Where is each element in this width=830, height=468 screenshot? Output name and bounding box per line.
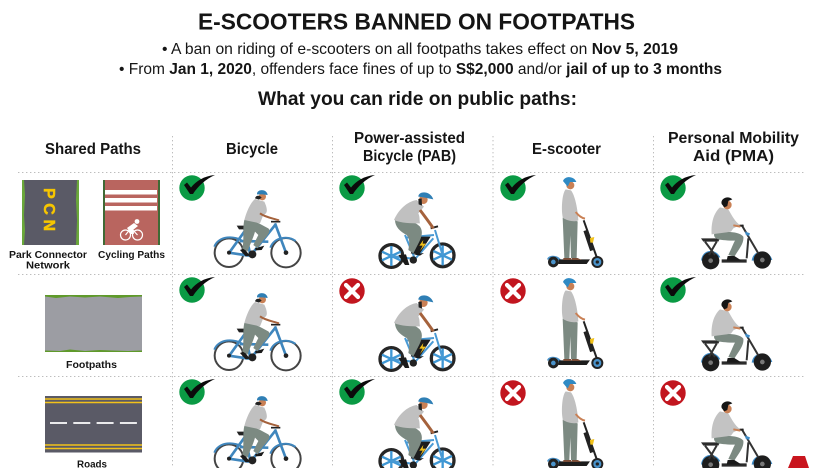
illustration: personal mobility aid (701, 401, 772, 468)
PAB allowed on shared paths (339, 175, 375, 201)
column header: personal mobility aid: Personal Mobility (668, 130, 799, 147)
PAB banned on footpaths (339, 278, 365, 304)
row 2: footpaths (179, 277, 772, 371)
illustration: e-scooter (547, 278, 603, 369)
illustration: bicycle (214, 396, 301, 468)
bullet: ban takes effect: • A ban on riding of e-scooters on all footpaths takes effect on Nov 5, 2019 (162, 41, 678, 58)
path image: cycling paths (103, 180, 160, 245)
label: park connector network (9, 250, 87, 272)
column header: personal mobility aid: Aid (PMA) (693, 148, 774, 165)
path image: park connector network (22, 180, 79, 245)
illustration: personal mobility aid (701, 299, 772, 371)
illustration: bicycle (214, 190, 301, 267)
label: park connector network: Network (26, 260, 70, 272)
e-scooter allowed on shared paths (500, 175, 536, 201)
e-scooter banned on footpaths (500, 278, 526, 304)
illustration: bicycle (214, 293, 301, 370)
row 1: allowed on shared paths (179, 175, 772, 269)
PMA banned on roads (660, 380, 686, 406)
table grid lines (18, 136, 804, 468)
illustration: power-assisted bicycle (380, 192, 454, 267)
illustration: personal mobility aid (701, 197, 772, 269)
label: cycling paths: Cycling Paths (98, 250, 165, 261)
column header: personal mobility aid (668, 130, 799, 165)
illustration: power-assisted bicycle (380, 397, 454, 468)
path image: footpaths (45, 295, 142, 352)
logo: red triangle mark (788, 456, 809, 468)
bicycle allowed on shared paths (179, 175, 215, 201)
subheading: What you can ride on public paths: (258, 88, 577, 110)
column header: power-assisted bicycle: Bicycle (PAB) (363, 148, 456, 165)
e-scooter banned on roads (500, 380, 526, 406)
column header: e-scooter: E-scooter (532, 141, 601, 158)
illustration: e-scooter (547, 177, 603, 268)
label: footpaths: Footpaths (66, 359, 117, 371)
title: E-SCOOTERS BANNED ON FOOTPATHS (198, 8, 635, 34)
bicycle allowed on footpaths (179, 277, 215, 303)
label: park connector network: Park Connector (9, 250, 87, 261)
row 3: roads (179, 379, 772, 468)
illustration: power-assisted bicycle (380, 295, 454, 370)
PMA allowed on footpaths (660, 277, 696, 303)
column header: bicycle: Bicycle (226, 141, 278, 158)
PAB allowed on roads (339, 379, 375, 405)
path image: park connector network: PCN (40, 188, 57, 231)
PMA allowed on shared paths (660, 175, 696, 201)
bicycle allowed on roads (179, 379, 215, 405)
column header: power-assisted bicycle: Power-assisted (354, 130, 465, 147)
path image: roads (45, 396, 142, 452)
column header: shared paths: Shared Paths (45, 141, 141, 158)
bullet: fines and jail: • From Jan 1, 2020, offenders face fines of up to S$2,000 and/or jail of up to 3 months (119, 61, 722, 78)
column header: power-assisted bicycle (354, 130, 465, 165)
illustration: e-scooter (547, 379, 603, 468)
